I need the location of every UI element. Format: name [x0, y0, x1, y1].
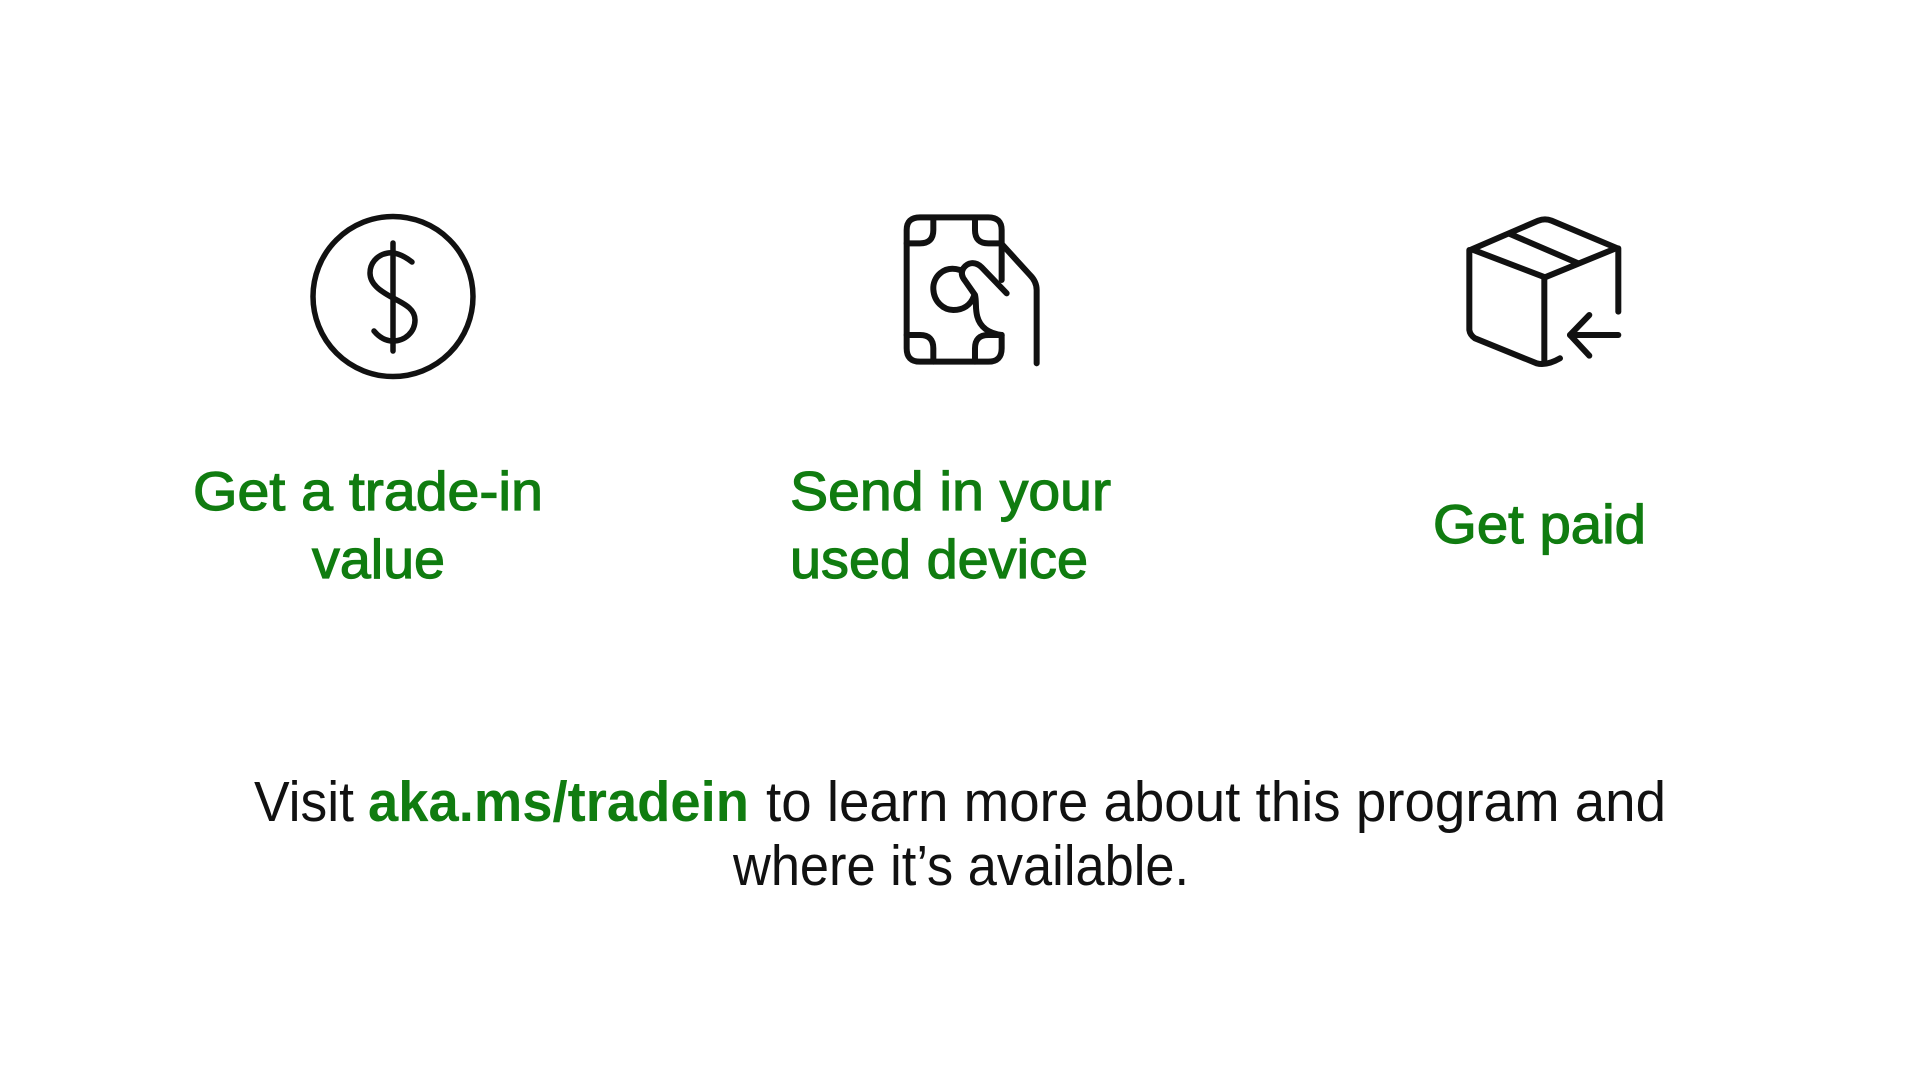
call to action text: where it’s available.: [732, 834, 1189, 898]
label: get paid: Get paid: [1433, 493, 1646, 555]
call to action text: Visit: [254, 770, 354, 834]
label: get a trade-in value: Get a trade-in: [193, 460, 543, 522]
label: get a trade-in value: [193, 460, 543, 590]
label: get a trade-in value: value: [312, 528, 445, 590]
icon: hand holding banknote: [907, 217, 1037, 363]
icon: dollar coin: [313, 216, 473, 376]
label: send in your used device: [790, 460, 1111, 590]
icon: package with return arrow: [1469, 219, 1618, 364]
call to action text: to learn more about this program and: [766, 770, 1666, 834]
label: send in your used device: used device: [790, 528, 1088, 590]
label: send in your used device: Send in your: [790, 460, 1111, 522]
call to action text: aka.ms/tradein: [368, 770, 749, 834]
call to action text: [254, 770, 1666, 898]
